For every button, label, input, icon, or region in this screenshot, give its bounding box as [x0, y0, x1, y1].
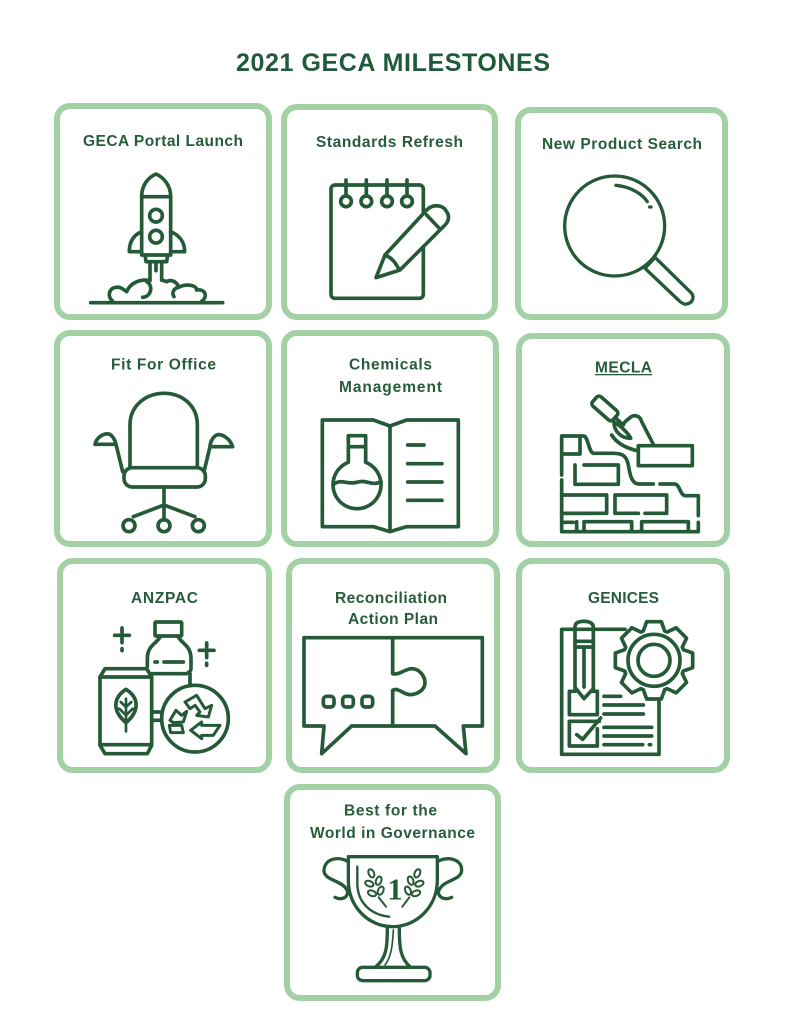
icon: magnifying glass [565, 176, 693, 304]
heading: Fit For Office: Fit For Office [111, 356, 216, 374]
panel: Best for the World in Governance [287, 787, 498, 998]
icon: open book with flask [322, 420, 458, 532]
panel: Fit For Office [57, 333, 269, 544]
icon: trophy: 1 [387, 872, 403, 906]
heading: ANZPAC: ANZPAC [131, 590, 198, 607]
icon: checklist, pencil and gear [562, 621, 693, 754]
panel: Chemicals Management [284, 333, 496, 544]
title: 2021 GECA MILESTONES [236, 49, 550, 77]
heading: Best for the World in Governance: World in Governance [310, 825, 475, 842]
heading: Chemicals Management: Chemicals [349, 356, 432, 374]
panel: Standards Refresh [284, 107, 495, 317]
heading: Best for the World in Governance [310, 803, 475, 842]
heading: Best for the World in Governance: Best for the [344, 803, 437, 820]
heading: GECA Portal Launch: GECA Portal Launch [83, 133, 243, 150]
icon: trophy [324, 857, 462, 981]
heading: GENICES: GENICES [588, 590, 659, 607]
heading: Standards Refresh: Standards Refresh [316, 134, 463, 151]
heading: Chemicals Management: Management [339, 379, 442, 396]
heading: MECLA: MECLA [595, 360, 652, 377]
icon: office chair [95, 393, 233, 532]
icon: puzzle speech bubbles [304, 638, 482, 754]
panel: MECLA [519, 336, 727, 544]
icon: bottle, can and recycling [100, 622, 228, 754]
heading: Reconciliation Action Plan: Action Plan [348, 611, 438, 628]
heading: Reconciliation Action Plan [335, 590, 447, 628]
heading: Reconciliation Action Plan: Reconciliation [335, 590, 447, 607]
panel: Reconciliation Action Plan [289, 561, 497, 770]
icon: notepad and pencil [331, 180, 448, 298]
panel: GECA Portal Launch [57, 106, 269, 317]
panel: GENICES [519, 561, 727, 770]
panel: ANZPAC [60, 561, 269, 770]
panel: New Product Search [518, 110, 725, 317]
heading: New Product Search: New Product Search [542, 136, 702, 153]
heading: Chemicals Management [339, 356, 442, 396]
icon: trowel and brick wall [562, 395, 698, 532]
icon: rocket [91, 174, 223, 303]
